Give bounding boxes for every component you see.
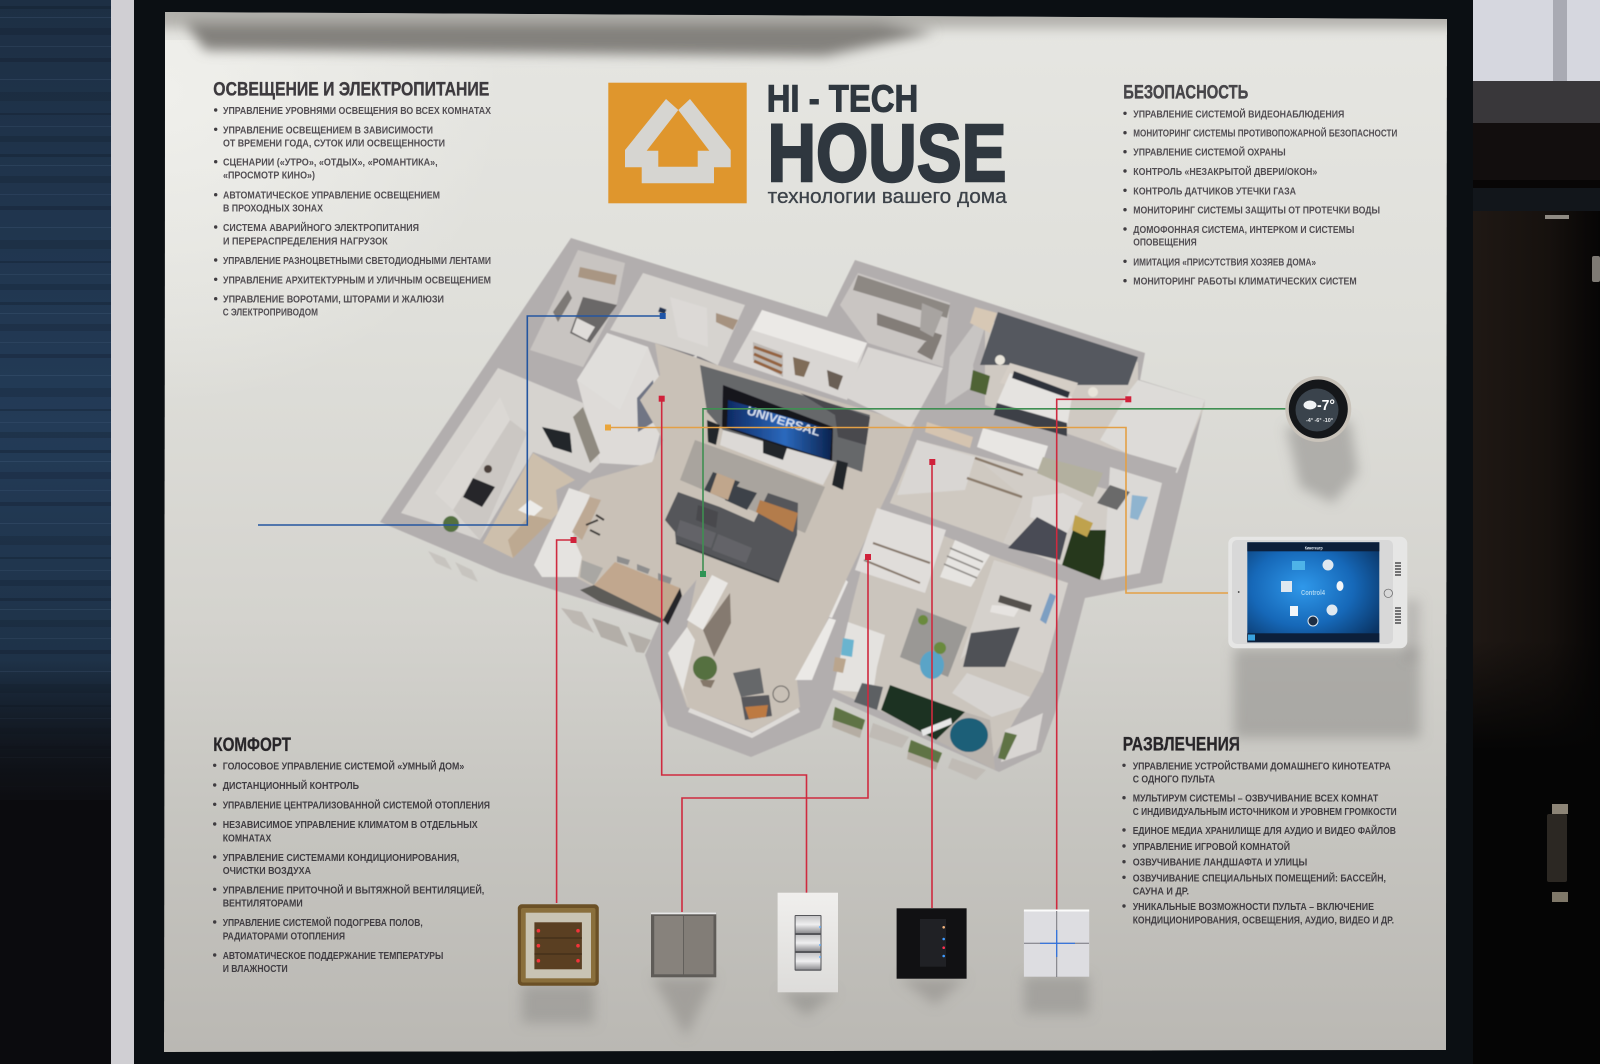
floor plan: 3D apartment (380, 238, 1205, 780)
tablet screen (1247, 542, 1379, 642)
room: kitchen (401, 368, 600, 540)
device: brass switch (518, 904, 599, 986)
bullet list (1123, 107, 1397, 288)
slab outline (380, 238, 1205, 772)
red line to switch 3 (659, 396, 806, 893)
TV stand and speakers (707, 420, 848, 490)
right wall top light area (1473, 0, 1600, 180)
white vertical strip (111, 0, 134, 1064)
red line to switch 4 (929, 459, 935, 908)
bullet list (213, 759, 490, 975)
bullet list: РАДИАТОРАМИ ОТОПЛЕНИЯ (223, 931, 345, 942)
bullet list: КОНДИЦИОНИРОВАНИЯ, ОСВЕЩЕНИЯ, АУДИО, ВИДЕО И ДР. (1133, 915, 1394, 926)
white block lower room (952, 673, 1030, 717)
bullet list: ОЗВУЧИВАНИЕ СПЕЦИАЛЬНЫХ ПОМЕЩЕНИЙ: БАССЕЙН, (1133, 871, 1386, 884)
right dark cabinet (1473, 180, 1600, 1064)
block wall with picture (577, 333, 668, 466)
corridor strip (945, 323, 985, 405)
red line to switch 5 (1057, 396, 1131, 911)
bullet list: МУЛЬТИРУМ СИСТЕМЫ – ОЗВУЧИВАНИЕ ВСЕХ КОМНАТ (1133, 794, 1379, 805)
bullet list: УПРАВЛЕНИЕ УРОВНЯМИ ОСВЕЩЕНИЯ ВО ВСЕХ КОМНАТАХ (223, 106, 491, 117)
tablet screen: Control4 (1301, 588, 1326, 597)
bullet list: УПРАВЛЕНИЕ СИСТЕМАМИ КОНДИЦИОНИРОВАНИЯ, (223, 853, 459, 864)
top bathroom (840, 273, 950, 367)
speaker slots and home button (1238, 563, 1401, 623)
heading: КОМФОРТ (213, 735, 291, 756)
bullet list: ГОЛОСОВОЕ УПРАВЛЕНИЕ СИСТЕМОЙ «УМНЫЙ ДОМ» (223, 759, 464, 772)
bullet list: МОНИТОРИНГ РАБОТЫ КЛИМАТИЧЕСКИХ СИСТЕМ (1133, 277, 1357, 288)
bullet list: УПРАВЛЕНИЕ СИСТЕМОЙ ОХРАНЫ (1133, 146, 1286, 159)
device: white keypad (778, 893, 838, 992)
section: lighting and power (213, 79, 491, 319)
bullet list: ВЕНТИЛЯТОРАМИ (223, 899, 303, 910)
main living floor (560, 343, 915, 732)
kids rug and pond (900, 608, 967, 679)
logo mark: orange square with house (608, 83, 747, 203)
plant (693, 656, 717, 688)
TV wall (700, 365, 870, 472)
bullet list: С ОДНОГО ПУЛЬТА (1133, 774, 1215, 785)
cabinet handle (1547, 804, 1568, 902)
device: wall tablet (1228, 537, 1407, 648)
bullet list: ЕДИНОЕ МЕДИА ХРАНИЛИЩЕ ДЛЯ АУДИО И ВИДЕО ФАЙЛОВ (1133, 824, 1396, 837)
bullet list: АВТОМАТИЧЕСКОЕ ПОДДЕРЖАНИЕ ТЕМПЕРАТУРЫ (223, 951, 443, 962)
bullet list: С ЭЛЕКТРОПРИВОДОМ (223, 308, 318, 319)
kids bedroom (1008, 467, 1162, 580)
bullet list (214, 106, 491, 319)
left blue textured wall (0, 0, 111, 1064)
dining table (580, 556, 682, 625)
room: entry hall (610, 273, 745, 378)
bullet list: АВТОМАТИЧЕСКОЕ УПРАВЛЕНИЕ ОСВЕЩЕНИЕМ (223, 191, 440, 202)
tablet screen: Кинотеатр (1305, 546, 1323, 551)
wardrobe (733, 310, 867, 400)
bullet list: ОЧИСТКИ ВОЗДУХА (223, 866, 311, 877)
red line to switch 2 (682, 554, 871, 912)
rug (680, 440, 825, 533)
room: top-left bathroom (530, 250, 625, 367)
heading: ОСВЕЩЕНИЕ И ЭЛЕКТРОПИТАНИЕ (213, 79, 489, 100)
second-floor stripes and closet (890, 422, 1103, 543)
planter boxes and tiles (832, 707, 1043, 780)
lower wing base floor (833, 508, 1068, 760)
heading: РАЗВЛЕЧЕНИЯ (1123, 734, 1240, 755)
bullet list (1122, 759, 1397, 926)
dining wall and desk (534, 488, 604, 577)
bullet list: ДОМОФОННАЯ СИСТЕМА, ИНТЕРКОМ И СИСТЕМЫ (1133, 225, 1354, 236)
bay white walls (688, 580, 848, 738)
connector lines (258, 313, 1286, 912)
orange line (605, 424, 1228, 593)
device: thermostat (1285, 376, 1351, 442)
temperature: -7° (1317, 397, 1335, 414)
wall band between bedroom and kids room (978, 412, 1177, 484)
bullet list: С ИНДИВИДУАЛЬНЫМ ИСТОЧНИКОМ И УРОВНЕМ ГРОМКОСТИ (1133, 807, 1397, 818)
armchair (733, 668, 789, 720)
bullet list: УПРАВЛЕНИЕ СИСТЕМОЙ ПОДОГРЕВА ПОЛОВ, (223, 916, 423, 929)
red line to switch 1 (557, 537, 576, 903)
forecast: -4° -6° -10° (1306, 418, 1333, 424)
bullet list: МОНИТОРИНГ СИСТЕМЫ ЗАЩИТЫ ОТ ПРОТЕЧКИ ВОДЫ (1133, 206, 1380, 217)
bedroom base floor (985, 320, 1205, 473)
logo (608, 78, 1008, 208)
blue line (258, 313, 666, 525)
bullet list: УПРАВЛЕНИЕ ЦЕНТРАЛИЗОВАННОЙ СИСТЕМОЙ ОТОПЛЕНИЯ (223, 798, 490, 811)
green line (700, 409, 1286, 577)
small window squares top-left (428, 551, 478, 582)
room below bathroom (845, 347, 943, 428)
bullet list: ОПОВЕЩЕНИЯ (1133, 238, 1197, 249)
bullet list: СИСТЕМА АВАРИЙНОГО ЭЛЕКТРОПИТАНИЯ (223, 221, 419, 234)
bullet list: НЕЗАВИСИМОЕ УПРАВЛЕНИЕ КЛИМАТОМ В ОТДЕЛЬНЫХ (223, 820, 478, 831)
bullet list: УПРАВЛЕНИЕ РАЗНОЦВЕТНЫМИ СВЕТОДИОДНЫМИ ЛЕНТАМИ (223, 256, 491, 267)
logo tagline: технологии вашего дома (768, 186, 1008, 208)
logo text: HOUSE: HOUSE (768, 108, 1006, 199)
bullet list: МОНИТОРИНГ СИСТЕМЫ ПРОТИВОПОЖАРНОЙ БЕЗОПАСНОСТИ (1133, 127, 1397, 140)
bullet list: И ПЕРЕРАСПРЕДЕЛЕНИЯ НАГРУЗОК (223, 236, 388, 247)
device: black keypad (897, 908, 967, 979)
section: entertainment (1122, 734, 1397, 926)
lower closet room (855, 508, 946, 593)
bullet list: САУНА И ДР. (1133, 886, 1189, 897)
bath (833, 622, 885, 710)
coffee tables (704, 472, 757, 510)
balcony (881, 685, 995, 770)
weather icon: cloud (1304, 400, 1316, 410)
bullet list: ОЗВУЧИВАНИЕ ЛАНДШАФТА И УЛИЦЫ (1133, 858, 1307, 869)
bullet list: В ПРОХОДНЫХ ЗОНАХ (223, 203, 323, 214)
device: steel switch (651, 912, 716, 977)
bullet list: УПРАВЛЕНИЕ ИГРОВОЙ КОМНАТОЙ (1133, 840, 1290, 853)
bullet list: УНИКАЛЬНЫЕ ВОЗМОЖНОСТИ ПУЛЬТА – ВКЛЮЧЕНИЕ (1133, 902, 1374, 913)
TV screen (722, 385, 833, 463)
bookshelf niche (668, 575, 731, 707)
bullet list: КОНТРОЛЬ ДАТЧИКОВ УТЕЧКИ ГАЗА (1133, 186, 1296, 197)
bedroom (970, 307, 1205, 473)
device shadows (522, 420, 1420, 1037)
sofa (665, 492, 798, 582)
windows under dining (561, 608, 651, 653)
bullet list: КОМНАТАХ (223, 833, 271, 844)
bullet list: ДИСТАНЦИОННЫЙ КОНТРОЛЬ (223, 779, 359, 792)
TV screen: UNIVERSAL (745, 403, 822, 439)
second kids room (960, 560, 1068, 673)
bullet list: УПРАВЛЕНИЕ УСТРОЙСТВАМИ ДОМАШНЕГО КИНОТЕАТРА (1133, 759, 1391, 772)
section: comfort (213, 735, 490, 975)
bullet list: ОТ ВРЕМЕНИ ГОДА, СУТОК ИЛИ ОСВЕЩЕННОСТИ (223, 138, 445, 149)
bullet list: ИМИТАЦИЯ «ПРИСУТСТВИЯ ХОЗЯЕВ ДОМА» (1133, 257, 1316, 268)
bullet list: СЦЕНАРИИ («УТРО», «ОТДЫХ», «РОМАНТИКА», (223, 158, 438, 169)
logo text: HI-TECH: HI - TECH (767, 78, 918, 120)
heading: БЕЗОПАСНОСТЬ (1123, 82, 1248, 103)
bullet list: УПРАВЛЕНИЕ ПРИТОЧНОЙ И ВЫТЯЖНОЙ ВЕНТИЛЯЦИЕЙ, (223, 883, 484, 896)
crib (940, 540, 990, 587)
bullet list: УПРАВЛЕНИЕ СИСТЕМОЙ ВИДЕОНАБЛЮДЕНИЯ (1133, 107, 1344, 120)
section: security (1123, 82, 1397, 288)
kitchen wood floor (483, 453, 575, 558)
bullet list: УПРАВЛЕНИЕ ВОРОТАМИ, ШТОРАМИ И ЖАЛЮЗИ (223, 295, 444, 306)
device: white four-key switch (1024, 910, 1089, 977)
bullet list: «ПРОСМОТР КИНО») (223, 171, 315, 182)
bullet list: УПРАВЛЕНИЕ АРХИТЕКТУРНЫМ И УЛИЧНЫМ ОСВЕЩЕНИЕМ (223, 275, 491, 286)
right wing base floor (890, 440, 1162, 580)
bullet list: И ВЛАЖНОСТИ (223, 964, 288, 975)
bullet list: УПРАВЛЕНИЕ ОСВЕЩЕНИЕМ В ЗАВИСИМОСТИ (223, 125, 433, 136)
bullet list: КОНТРОЛЬ «НЕЗАКРЫТОЙ ДВЕРИ/ОКОН» (1133, 165, 1317, 178)
